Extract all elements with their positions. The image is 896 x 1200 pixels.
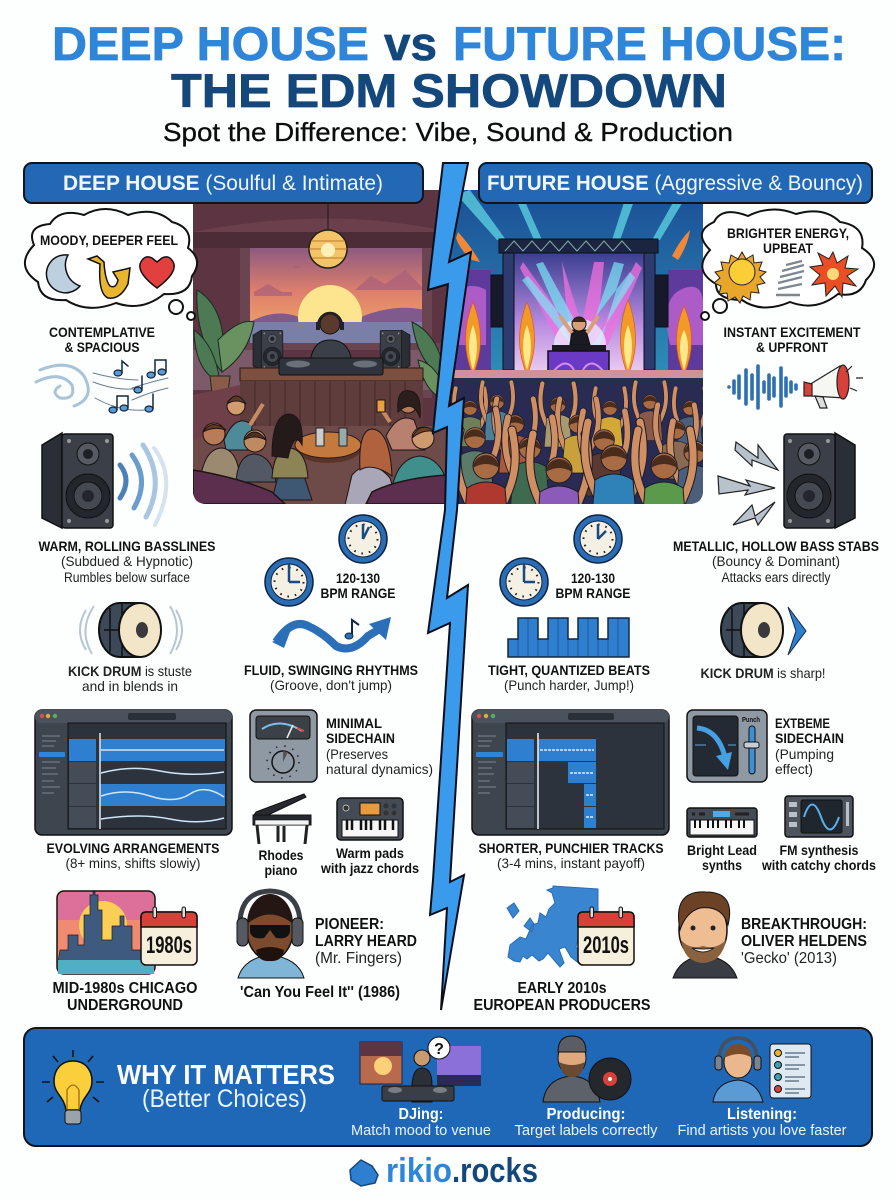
icon: sun	[714, 252, 766, 303]
label: listening	[678, 1106, 846, 1139]
label: fm synthesis: with catchy chords	[761, 857, 876, 873]
label: warm basslines: (Subdued & Hypnotic)	[61, 553, 193, 569]
thought cloud: brighter	[701, 209, 874, 320]
title: DEEP HOUSE	[52, 17, 369, 70]
label: instant excitement	[724, 324, 861, 355]
icon: pumping compressor: Punch	[742, 717, 760, 724]
header: future house: FUTURE HOUSE (Aggressive & Bouncy)	[487, 172, 863, 195]
label: listening: Listening:	[727, 1106, 797, 1123]
label: minimal sidechain: SIDECHAIN	[326, 730, 395, 746]
icon: clocks right	[500, 515, 622, 606]
icon: saxophone	[88, 256, 130, 298]
label: metallic bass	[673, 538, 879, 585]
label: fm synthesis: FM synthesis	[780, 842, 859, 858]
icon: metallic shards	[718, 442, 778, 525]
label: fluid rhythms: (Groove, don't jump)	[270, 677, 392, 693]
label: pioneer	[315, 916, 417, 967]
label: producing: Producing:	[546, 1106, 626, 1123]
label: minimal sidechain: MINIMAL	[326, 715, 382, 731]
label: warm basslines: Rumbles below surface	[64, 570, 190, 585]
icon: dj choosing venue	[360, 1037, 481, 1102]
label: kick left	[68, 663, 192, 694]
label: rhodes	[258, 847, 304, 878]
header: deep house	[24, 163, 423, 203]
label: breakthrough: 'Gecko' (2013)	[741, 950, 837, 967]
label: rhodes: Rhodes	[258, 847, 304, 863]
icon: kick drum left	[80, 603, 182, 657]
label: evolving	[46, 840, 220, 871]
icon: speaker left	[42, 433, 113, 528]
label: breakthrough: OLIVER HELDENS	[741, 933, 867, 950]
panel: why it matters	[24, 1028, 872, 1146]
label: producing	[514, 1106, 658, 1139]
label: breakthrough: BREAKTHROUGH:	[741, 916, 867, 933]
label: extreme sidechain: EXTBEME	[775, 715, 830, 731]
icon: megaphone	[804, 365, 863, 408]
label: chicago: UNDERGROUND	[67, 997, 183, 1014]
subtitle: Spot the Difference: Vibe, Sound & Production	[163, 117, 733, 147]
icon: oliver heldens portrait	[673, 892, 737, 978]
booth	[547, 345, 610, 370]
heading: (Better Choices)	[142, 1085, 307, 1113]
audience	[200, 391, 447, 505]
icon: listener with playlist	[713, 1038, 811, 1102]
label: kick left: and in blends in	[82, 678, 178, 694]
icon: fm synth	[785, 796, 853, 837]
stage dj	[560, 316, 598, 345]
label: pioneer: (Mr. Fingers)	[315, 950, 402, 967]
title: FUTURE HOUSE:	[453, 17, 846, 70]
title: vs	[384, 17, 437, 70]
label: pioneer: LARRY HEARD	[315, 933, 417, 950]
icon: dj choosing venue: ?	[434, 1041, 444, 1058]
label: shorter tracks	[478, 840, 664, 871]
label: pioneer: PIONEER:	[315, 916, 384, 933]
label: tight beats: (Punch harder, Jump!)	[504, 677, 634, 693]
icon: burst	[810, 252, 858, 297]
label: warm pads: Warm pads	[336, 845, 404, 861]
label: producing: Target labels correctly	[514, 1122, 658, 1139]
label: warm pads: with jazz chords	[320, 860, 419, 876]
label: european producers	[474, 980, 651, 1014]
logo: rikio.rocks: rikio	[386, 1152, 452, 1190]
icon: calendar 1980s: 1980s	[146, 932, 192, 959]
heading	[117, 1059, 335, 1113]
scene: future house festival stage	[450, 190, 703, 504]
logo: rikio.rocks: .rocks	[452, 1152, 538, 1190]
icon: meter	[250, 710, 317, 782]
thought cloud: brighter: BRIGHTER ENERGY,	[727, 225, 849, 241]
truss	[491, 239, 668, 370]
icon: chicago skyline	[57, 891, 155, 974]
scene: deep house sunset lounge	[193, 190, 450, 505]
label: evolving: (8+ mins, shifts slowiy)	[66, 855, 200, 871]
logo: rikio.rocks	[350, 1152, 538, 1190]
label: minimal sidechain	[326, 715, 433, 777]
title	[52, 17, 846, 117]
label: evolving: EVOLVING ARRANGEMENTS	[46, 840, 220, 856]
label: djing	[351, 1106, 491, 1139]
label: breakthrough	[741, 916, 867, 967]
label: metallic bass: (Bouncy & Dominant)	[712, 553, 840, 569]
header: deep house: DEEP HOUSE (Soulful & Intimate)	[63, 172, 383, 195]
lightning bolt divider	[428, 163, 471, 1010]
icon: spring	[776, 261, 804, 295]
label: minimal sidechain: (Preserves	[326, 746, 388, 762]
label: warm pads	[320, 845, 419, 876]
icon: calendar 2010s	[578, 907, 634, 965]
label: extreme sidechain	[775, 715, 844, 777]
label: kick left: KICK DRUM is stuste	[68, 663, 192, 679]
icon: heart	[140, 257, 174, 288]
plant left	[194, 290, 254, 402]
icon: kick drum right	[721, 603, 806, 657]
header: future house	[479, 163, 872, 203]
label: extreme sidechain: SIDECHAIN	[775, 730, 844, 746]
label: fluid rhythms	[244, 662, 418, 693]
icon: larry heard portrait	[237, 891, 304, 978]
label: fm synthesis	[761, 842, 876, 873]
heading: WHY IT MATTERS	[117, 1059, 335, 1090]
dj	[310, 312, 352, 358]
label: metallic bass: Attacks ears directly	[722, 570, 831, 585]
icon: clocks left	[265, 515, 387, 606]
title: THE EDM SHOWDOWN	[171, 64, 727, 117]
label: djing: Match mood to venue	[351, 1122, 491, 1139]
label: djing: DJing:	[398, 1106, 444, 1123]
icon: waveform	[729, 366, 796, 408]
icon: producer with vinyl	[543, 1036, 631, 1102]
label: warm basslines: WARM, ROLLING BASSLINES	[38, 538, 216, 554]
label: contemplative: CONTEMPLATIVE	[49, 324, 155, 340]
label: instant excitement: & UPFRONT	[756, 339, 828, 355]
label: chicago: MID-1980s CHICAGO	[52, 980, 198, 997]
label: european producers: EUROPEAN PRODUCERS	[474, 997, 651, 1014]
icon: speaker right	[784, 433, 855, 528]
label: bpm right	[556, 570, 630, 601]
icon: europe map	[507, 886, 598, 967]
label: bpm left	[320, 570, 396, 601]
icon: swing arrow	[272, 617, 391, 648]
icon: calendar 2010s: 2010s	[583, 932, 629, 959]
icon: lightbulb	[42, 1050, 104, 1124]
label: bpm left: BPM RANGE	[320, 585, 396, 601]
thought cloud: brighter: UPBEAT	[763, 240, 813, 256]
label: bright lead: synths	[702, 857, 742, 873]
label: extreme sidechain: effect)	[775, 761, 813, 777]
icon: synth keyboard	[337, 798, 403, 840]
label: tight beats	[488, 662, 650, 693]
label: fluid rhythms: FLUID, SWINGING RHYTHMS	[244, 662, 418, 678]
icon: swirl and notes	[36, 360, 168, 413]
label: warm basslines	[38, 538, 216, 585]
icon: moon	[46, 255, 80, 293]
plant right	[411, 321, 440, 396]
thought cloud: moody: MOODY, DEEPER FEEL	[40, 232, 178, 248]
label: bpm left: 120-130	[336, 570, 380, 586]
daw: shorter tracks	[472, 710, 669, 835]
label: shorter tracks: SHORTER, PUNCHIER TRACKS	[478, 840, 664, 856]
table	[295, 428, 361, 463]
label: can you feel it: 'Can You Feel It'' (1986)	[240, 984, 400, 1001]
label: contemplative	[49, 324, 155, 355]
label: bright lead: Bright Lead	[687, 842, 757, 858]
label: shorter tracks: (3-4 mins, instant payoff)	[497, 855, 645, 871]
label: bpm right: BPM RANGE	[556, 585, 630, 601]
label: minimal sidechain: natural dynamics)	[326, 761, 433, 777]
label: contemplative: & SPACIOUS	[64, 339, 140, 355]
label: instant excitement: INSTANT EXCITEMENT	[724, 324, 861, 340]
label: listening: Find artists you love faster	[678, 1122, 846, 1139]
label: kick right: KICK DRUM is sharp!	[700, 665, 826, 681]
label: bright lead	[687, 842, 757, 873]
label: tight beats: TIGHT, QUANTIZED BEATS	[488, 662, 650, 678]
icon: calendar 1980s	[141, 907, 197, 965]
thought cloud: moody	[25, 209, 197, 320]
daw: evolving arrangements	[35, 710, 232, 835]
label: extreme sidechain: (Pumping	[775, 746, 834, 762]
label: rhodes: piano	[264, 862, 298, 878]
label: european producers: EARLY 2010s	[518, 980, 607, 997]
icon: quantized bars	[508, 618, 629, 657]
flames	[466, 300, 692, 375]
lamp	[309, 200, 347, 268]
label: bpm right: 120-130	[571, 570, 615, 586]
label: chicago	[52, 980, 198, 1014]
icon: piano	[253, 794, 311, 844]
icon: pumping compressor	[687, 710, 767, 782]
icon: sound waves	[120, 445, 166, 525]
icon: lead synth	[687, 808, 757, 837]
sofas	[193, 470, 450, 504]
crowd	[452, 380, 703, 504]
